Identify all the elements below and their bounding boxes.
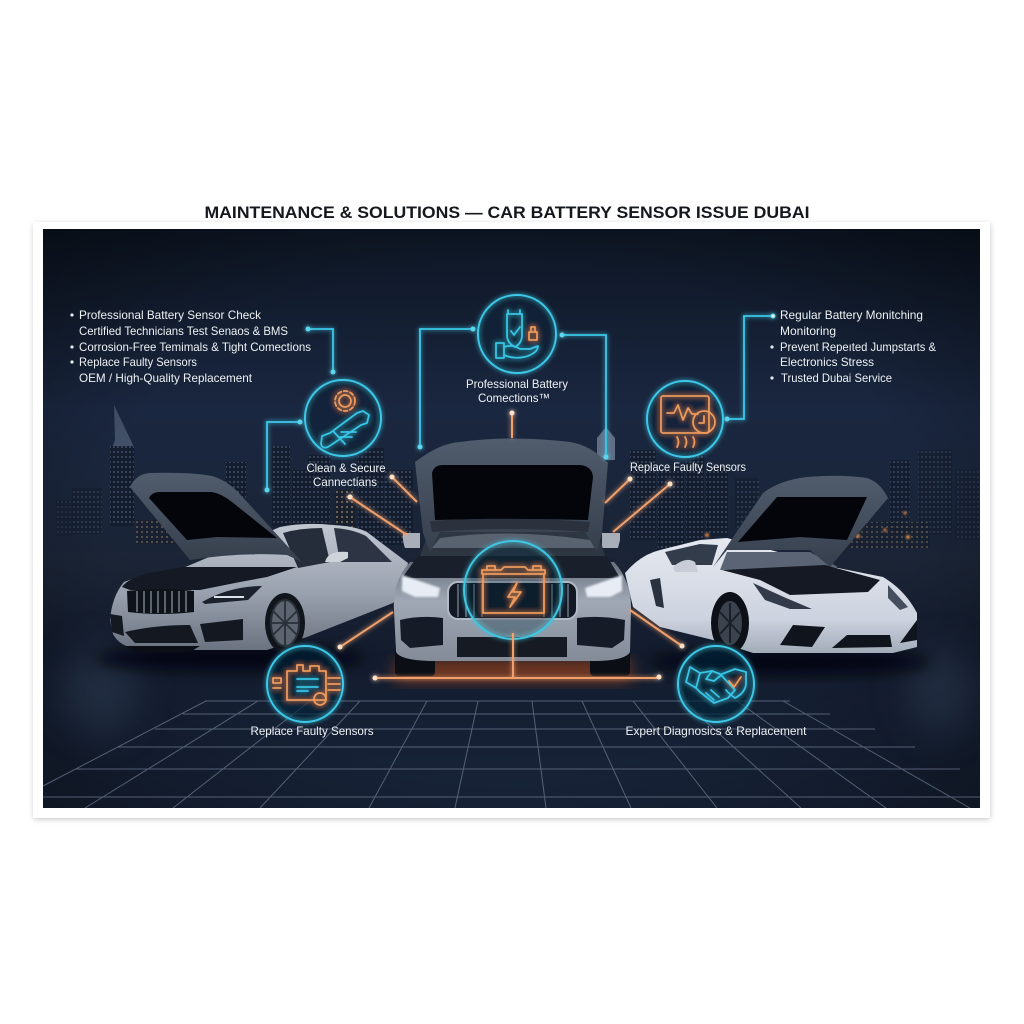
text block: right bullet list: Trusted Dubai Service <box>781 371 892 385</box>
skyline: left towers <box>56 405 413 548</box>
text block: left bullet list: Professional Battery Sensor Check <box>79 308 262 322</box>
text block: right bullet list: Prevent Repeıted Jumpstarts & <box>780 340 936 354</box>
label: clean and secure connections: Cannectians <box>313 475 377 489</box>
label: clean and secure connections: Clean & Secure <box>306 461 386 475</box>
left car open hood <box>130 473 302 562</box>
icon: monitor and clock <box>647 381 723 457</box>
panel: dark scene <box>43 229 980 808</box>
text block: left bullet list <box>70 308 311 385</box>
label: expert diagnostics and replacement: Expert Diagnosics & Replacement <box>626 724 807 738</box>
connectors: cyan lines <box>264 314 776 492</box>
text block: left bullet list: Corrosion-Free Temimals & Tight Comections <box>79 340 311 354</box>
right car open hood <box>713 476 888 567</box>
panel: white photo frame <box>33 222 990 819</box>
car: left silver sedan <box>110 473 408 653</box>
text block: left bullet list: Replace Faulty Sensors <box>79 355 197 369</box>
icon: replace faulty sensors module <box>267 646 343 722</box>
label: replace faulty sensors right: Replace Faulty Sensors <box>630 460 746 474</box>
label: professional battery connections: Professional Battery <box>466 377 568 391</box>
car: right white sports car <box>625 476 917 654</box>
label: professional battery connections: Comections™ <box>478 391 550 405</box>
centre car open hood <box>415 438 608 552</box>
text block: right bullet list: Electronics Stress <box>780 355 874 369</box>
text block: right bullet list: Monitoring <box>780 324 836 338</box>
text block: right bullet list: Regular Battery Monitching <box>780 308 923 322</box>
floor reflection highlights <box>60 645 975 735</box>
text block: left bullet list: OEM / High-Quality Replacement <box>79 371 253 385</box>
label: clean and secure connections <box>307 464 385 486</box>
label: replace faulty sensors bottom: Replace Faulty Sensors <box>250 724 374 738</box>
connectors: orange lines <box>338 410 684 680</box>
text block: right bullet list <box>770 308 936 385</box>
skyline: right towers <box>597 427 979 550</box>
floor grid <box>43 701 980 808</box>
icon: handshake and shield <box>678 646 754 722</box>
label: professional battery connections <box>466 380 568 402</box>
battery hub: circle with battery icon <box>464 541 562 639</box>
icon: professional battery shield and hand <box>478 295 556 373</box>
skyline: orange city lights <box>705 511 910 539</box>
car: centre silver sedan <box>394 438 631 676</box>
floor shadows <box>95 645 930 675</box>
red glow under centre car <box>395 660 631 682</box>
text block: left bullet list: Certified Technicians Test Senaos & BMS <box>79 324 288 338</box>
icon: gear and wrench <box>305 380 381 456</box>
title: MAINTENANCE & SOLUTIONS — CAR BATTERY SENSOR ISSUE DUBAI <box>204 203 809 222</box>
